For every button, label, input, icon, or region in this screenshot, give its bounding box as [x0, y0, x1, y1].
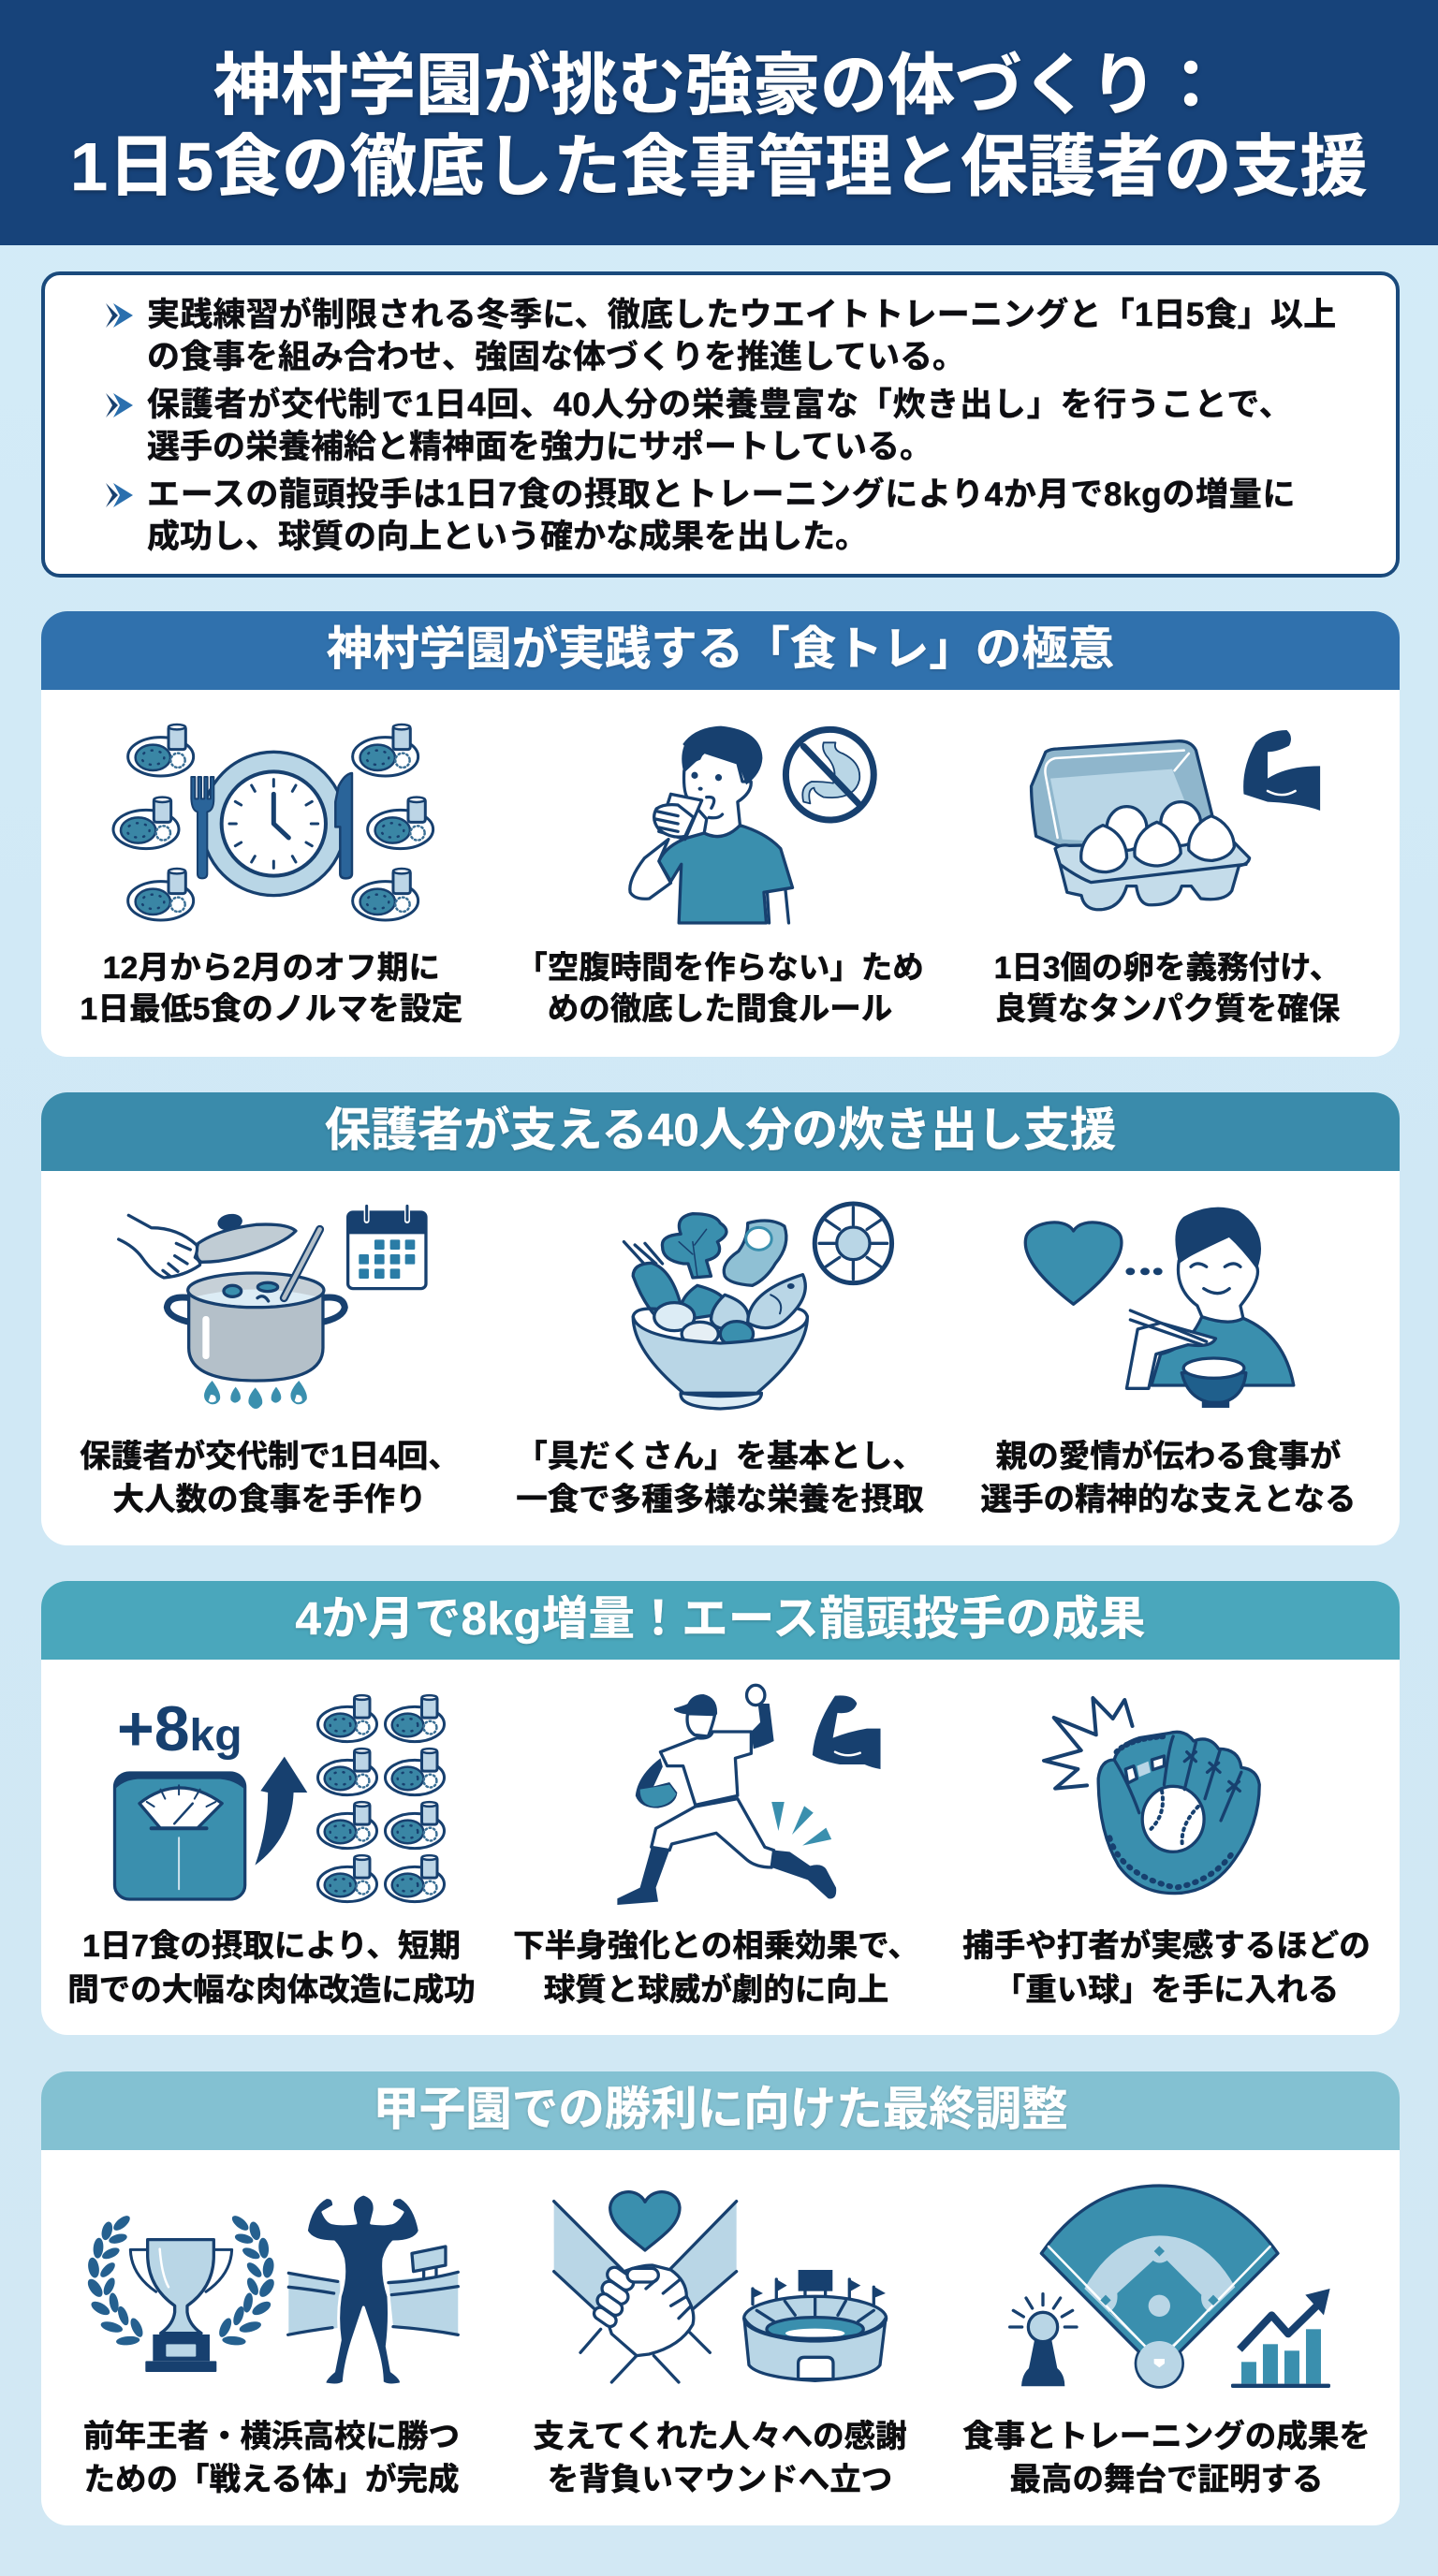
icon: person drinking and no-empty-stomach sign [630, 726, 873, 923]
icon: stadium [744, 2270, 887, 2380]
icon: baseball field [1041, 2186, 1278, 2387]
caption 2: 「空腹時間を作らない」ため [516, 951, 924, 986]
icon: bowl of ingredients [624, 1204, 892, 1409]
panel: summary [41, 271, 1400, 578]
caption 3: 良質なタンパク質を確保 [995, 992, 1340, 1027]
icon: flexed bicep [1243, 730, 1320, 811]
caption 1: ための「戦える体」が完成 [84, 2463, 459, 2497]
caption 3: 捕手や打者が実感するほどの [962, 1929, 1371, 1964]
caption 3: 1日3個の卵を義務付け、 [994, 951, 1341, 986]
caption 2: 一食で多種多様な栄養を摂取 [516, 1483, 924, 1517]
icon: scale with rising arrow [114, 1757, 307, 1899]
icon: rising bar chart [1231, 2289, 1330, 2388]
caption 3: 食事とトレーニングの成果を [962, 2420, 1371, 2454]
summary point 3 [106, 476, 1296, 555]
caption 3 [962, 1928, 1371, 2008]
icon: +8kg label: +8kg [117, 1693, 242, 1764]
caption 1: 1日最低5食のノルマを設定 [80, 992, 462, 1027]
heading: 4か月で8kg増量！エース龍頭投手の成果 [295, 1593, 1146, 1645]
caption 1 [67, 1928, 476, 2008]
caption 2 [513, 1928, 919, 2008]
heading: 神村学園が実践する「食トレ」の極意 [327, 623, 1114, 675]
caption 2 [516, 951, 924, 1027]
heading [41, 1581, 1400, 1660]
summary point 2 [106, 386, 1292, 465]
heading [41, 1092, 1400, 1171]
summary point 3: 成功し、球質の向上という確かな成果を出した。 [147, 519, 868, 555]
caption 1: 前年王者・横浜高校に勝つ [83, 2420, 460, 2454]
summary point 1: 実践練習が制限される冬季に、徹底したウエイトトレーニングと「1日5食」以上 [147, 297, 1336, 333]
icon: trophy and laurel [85, 2213, 277, 2372]
summary point 3: エースの龍頭投手は1日7食の摂取とトレーニングにより4か月で8kgの増量に [147, 476, 1296, 513]
icon: plates around clock [113, 724, 433, 920]
caption 3 [994, 951, 1341, 1027]
panel: 食トレの極意 [41, 611, 1400, 1057]
icon: heart and smiling person eating [1025, 1208, 1294, 1408]
panel: 炊き出し支援 [41, 1092, 1400, 1545]
icon: calendar [348, 1205, 426, 1289]
icon: flexed bicep [813, 1695, 881, 1769]
summary point 1: の食事を組み合わせ、強固な体づくりを推進している。 [147, 339, 965, 375]
caption 2: 支えてくれた人々への感謝 [533, 2420, 907, 2454]
caption 2: めの徹底した間食ルール [548, 992, 892, 1027]
header banner [0, 0, 1438, 245]
icon: glove and ball with impact burst [1044, 1698, 1259, 1894]
caption 3: 「重い球」を手に入れる [994, 1973, 1339, 2008]
title [70, 49, 1368, 205]
icon: pitcher [617, 1685, 836, 1905]
caption 3 [962, 2419, 1371, 2497]
caption 2 [533, 2419, 907, 2497]
caption 1: 保護者が交代制で1日4回、 [80, 1440, 460, 1474]
heading [41, 611, 1400, 690]
caption 1 [80, 1439, 460, 1517]
caption 1: 間での大幅な肉体改造に成功 [67, 1973, 476, 2008]
caption 3: 選手の精神的な支えとなる [981, 1483, 1356, 1517]
caption 2: 「具だくさん」を基本とし、 [516, 1440, 924, 1474]
caption 2: 下半身強化との相乗効果で、 [513, 1929, 919, 1964]
caption 2: 球質と球威が劇的に向上 [544, 1973, 888, 2008]
icon: spotlight [1010, 2294, 1077, 2386]
heading: 保護者が支える40人分の炊き出し支援 [325, 1105, 1116, 1156]
caption 3 [981, 1439, 1356, 1517]
panel: 最終調整 [41, 2071, 1400, 2525]
heading: 甲子園での勝利に向けた最終調整 [373, 2084, 1068, 2135]
caption 2: を背負いマウンドへ立つ [548, 2463, 892, 2497]
title: 1日5食の徹底した食事管理と保護者の支援 [70, 130, 1368, 205]
caption 1: 大人数の食事を手作り [112, 1483, 427, 1517]
title: 神村学園が挑む強豪の体づくり： [213, 49, 1225, 124]
caption 1 [83, 2419, 460, 2497]
icon: muscular silhouette in stadium [288, 2194, 458, 2385]
caption 2 [516, 1440, 924, 1517]
caption 3: 親の愛情が伝わる食事が [996, 1440, 1341, 1474]
summary point 2: 保護者が交代制で1日4回、40人分の栄養豊富な「炊き出し」を行うことで、 [147, 387, 1292, 423]
panel: 龍頭投手の成果 [41, 1581, 1400, 2035]
summary point 1 [106, 296, 1336, 375]
caption 1: 1日7食の摂取により、短期 [82, 1929, 461, 1964]
icon: egg carton [1032, 741, 1250, 910]
icon: pot on flame with hand and lid [119, 1212, 345, 1409]
caption 1: 12月から2月のオフ期に [103, 951, 440, 986]
caption 1 [80, 951, 462, 1027]
caption 3: 最高の舞台で証明する [1009, 2463, 1324, 2497]
icon: clasped hands with heart [554, 2192, 737, 2382]
summary point 2: 選手の栄養補給と精神面を強力にサポートしている。 [147, 429, 932, 465]
icon: eight plates [318, 1695, 444, 1902]
heading [41, 2071, 1400, 2150]
